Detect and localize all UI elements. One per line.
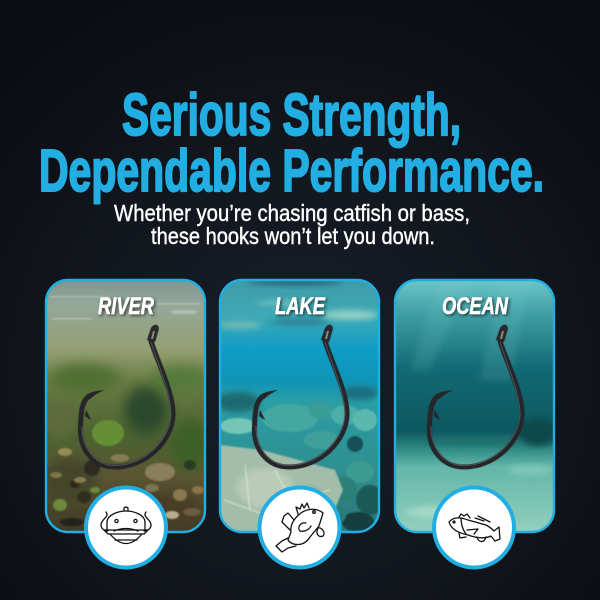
panel: lake — [216, 280, 384, 568]
icon: sunfish — [260, 488, 340, 568]
hook: ocean — [429, 325, 522, 467]
panel: ocean — [395, 280, 558, 568]
panel: river — [42, 280, 210, 568]
lake photo background — [216, 280, 384, 532]
icon: catfish — [86, 488, 166, 568]
lake label: LAKE — [275, 293, 326, 320]
subtitle: Whether you’re chasing catfish or bass, — [114, 200, 470, 226]
hook: lake — [254, 325, 347, 467]
lake panel border — [220, 280, 379, 532]
subtitle: these hooks won’t let you down. — [151, 223, 435, 249]
river photo background — [42, 280, 210, 532]
ocean label: OCEAN — [442, 293, 509, 320]
hook: river — [80, 325, 173, 467]
subtitle — [114, 200, 470, 249]
title: Serious Strength, — [122, 82, 461, 148]
ocean panel border — [395, 280, 554, 532]
title — [39, 82, 544, 204]
river label: RIVER — [98, 293, 155, 320]
river panel border — [46, 280, 205, 532]
icon: bass — [434, 488, 514, 568]
ocean photo background — [395, 280, 558, 532]
